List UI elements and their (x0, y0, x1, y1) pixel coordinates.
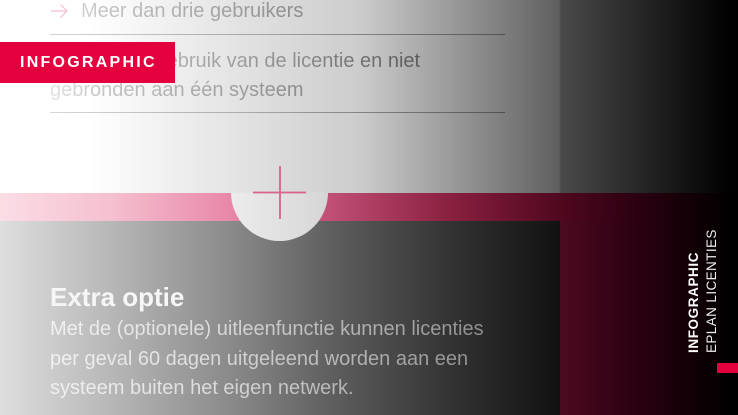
list item: meer dan drie gebruikers (51, 0, 303, 22)
text: meer dan drie gebruikers (0, 0, 738, 23)
band: pink to dark red (0, 193, 738, 221)
label: infographic (0, 42, 175, 83)
text: uitleenfunctie (50, 318, 484, 399)
divider line 1 (50, 34, 505, 35)
text: uitleenfunctie: per geval 60 dagen uitgeleend worden aan een (50, 348, 468, 370)
background: top gradient (0, 0, 738, 193)
text: gebruik van de licentie: Flexibel gebruik van de licentie en niet (81, 50, 420, 72)
accent bar (717, 363, 738, 373)
text: meer dan drie gebruikers: Meer dan drie gebruikers (81, 0, 303, 22)
icon: arrow (51, 4, 68, 18)
divider line 2 (50, 112, 505, 113)
panel: dark red right column (560, 221, 738, 415)
text: gebonden aan een systeem: gebronden aan één systeem (50, 79, 304, 101)
text: uitleenfunctie: systeem buiten het eigen netwerk. (50, 377, 354, 399)
heading: extra optie: Extra optie (50, 282, 184, 312)
label: infographic: INFOGRAPHIC (20, 54, 157, 71)
text: eplan licenties vertical: EPLAN LICENTIES (704, 229, 719, 353)
text: gebruik van de licentie (0, 49, 738, 73)
panel: extra optie (0, 221, 560, 415)
vertical title (686, 229, 719, 353)
icon: plus in semicircle (231, 166, 328, 241)
text: uitleenfunctie: Met de (optionele) uitleenfunctie kunnen licenties (50, 318, 484, 340)
text: infographic vertical: INFOGRAPHIC (686, 252, 701, 353)
text: gebonden aan een systeem (0, 78, 738, 102)
